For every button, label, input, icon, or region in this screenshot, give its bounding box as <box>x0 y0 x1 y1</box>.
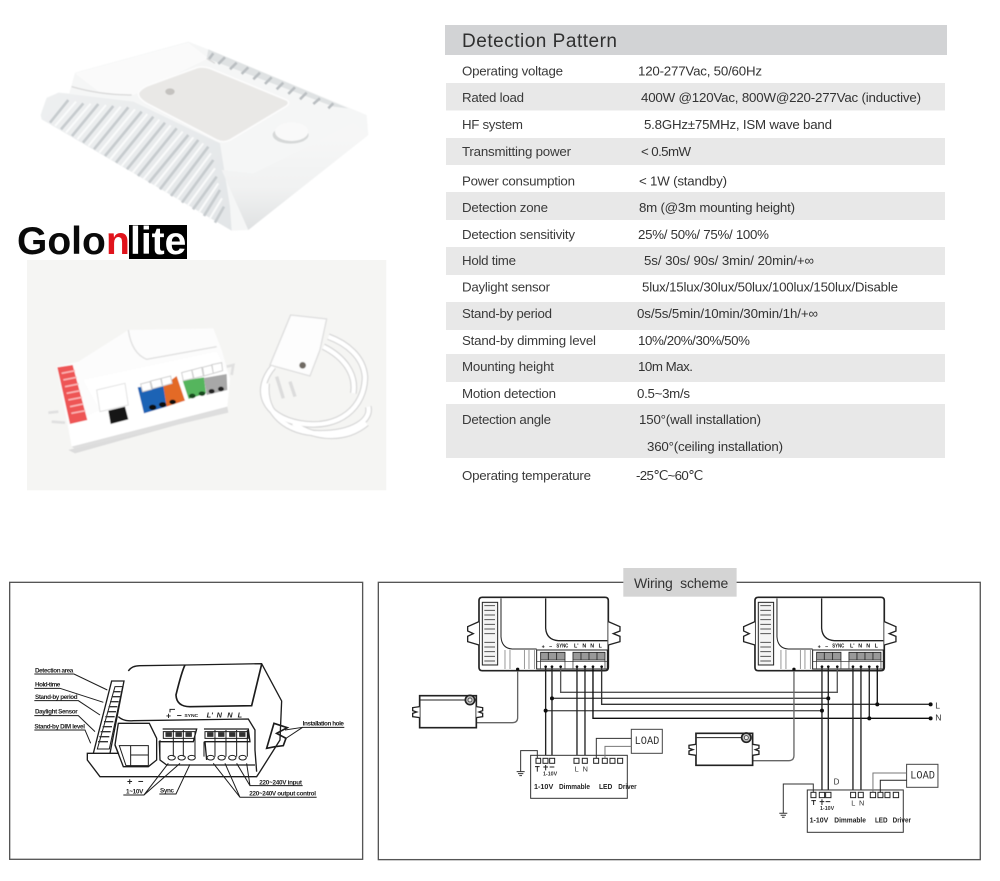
left heat sink fins <box>41 93 232 231</box>
table heading <box>445 25 947 55</box>
LED driver 2: N <box>859 799 864 808</box>
ground wire 2 <box>779 784 813 817</box>
terminal colours <box>138 383 167 413</box>
table: detection pattern specifications: < 0.5mW <box>641 144 691 159</box>
table: detection pattern specifications: 10m Max. <box>638 359 693 374</box>
sensor module line drawing <box>87 664 282 777</box>
table: detection pattern specifications: Mounting height <box>462 359 554 374</box>
terminal holes <box>168 755 246 760</box>
front lower edge <box>222 123 368 230</box>
table: detection pattern specifications: 360°(ceiling installation) <box>647 439 783 454</box>
table: detection pattern specifications: Stand-by dimming level <box>462 333 596 348</box>
sensor module 2: N <box>866 644 870 650</box>
sensor module 2: L <box>875 644 879 650</box>
callout labels: Stand-by DIM level <box>34 723 85 730</box>
sensor module 1: L' <box>574 644 579 650</box>
top cover plate <box>75 43 208 95</box>
RJ jack <box>97 383 128 412</box>
table: detection pattern specifications: < 1W (standby) <box>639 174 727 188</box>
table: detection pattern specifications: -25℃~60℃ <box>636 468 703 483</box>
table: detection pattern specifications: Motion detection <box>462 386 556 401</box>
line labels L and N <box>935 701 942 723</box>
table: detection pattern specifications <box>445 25 947 483</box>
table: detection pattern specifications: 150°(wall installation) <box>639 412 761 427</box>
table heading: Detection Pattern <box>462 31 617 52</box>
LOAD box 1 <box>596 729 662 758</box>
callout labels: Hold-time <box>35 682 61 689</box>
lamp body <box>42 42 368 231</box>
sensor module 1 <box>468 597 620 671</box>
table: detection pattern specifications: 120-277Vac, 50/60Hz <box>638 64 762 78</box>
table: detection pattern specifications: Stand-by period <box>462 306 552 321</box>
panel: wiring scheme <box>378 568 980 860</box>
LED driver 2: 1-10V <box>820 806 835 812</box>
LOAD box 2 <box>873 764 938 792</box>
table: detection pattern specifications: 0s/5s/5min/10min/30min/1h/+∞ <box>637 306 819 321</box>
table: detection pattern specifications: Transmitting power <box>462 144 572 159</box>
table: detection pattern specifications: Detection zone <box>462 200 548 215</box>
remote sensor head <box>270 315 327 376</box>
terminal markings: N <box>227 711 233 720</box>
table: detection pattern specifications: HF system <box>462 117 523 132</box>
table: detection pattern specifications: 400W @120Vac, 800W@220-277Vac (inductive) <box>641 90 921 105</box>
callout labels: − <box>138 776 144 786</box>
wiring label tab <box>623 568 737 597</box>
LED driver 2: L <box>851 799 855 808</box>
sensor head cables <box>476 669 794 761</box>
terminal markings: L <box>238 711 243 720</box>
table: detection pattern specifications: 5lux/15lux/30lux/50lux/100lux/150lux/Disable <box>642 280 898 294</box>
LED driver 1: N <box>583 764 588 773</box>
drop wires to drivers <box>546 667 861 792</box>
sensor module 2: N <box>858 644 862 650</box>
LED driver 1: 1-10V <box>534 782 554 791</box>
junction dots <box>516 665 933 720</box>
table: detection pattern specifications: 5s/ 30s/ 90s/ 3min/ 20min/+∞ <box>644 253 815 268</box>
sensor module 2: + <box>818 644 821 650</box>
LED driver 1: 1-10V <box>543 772 558 778</box>
brand logo: Golonlite: n <box>106 220 130 263</box>
terminal markings: + <box>166 710 171 720</box>
sensor module body <box>57 328 230 447</box>
terminal markings: − <box>177 710 182 720</box>
DIP switch block <box>57 365 87 424</box>
wiring label tab: Wiring scheme <box>634 575 729 591</box>
sensor module 1: SYNC <box>556 644 568 650</box>
LED driver 1: L <box>575 764 579 773</box>
callout labels: 220~240V output control <box>249 790 316 797</box>
callout labels: Installation hole <box>303 721 344 728</box>
leader lines <box>34 674 344 797</box>
photo: sensor module and cable <box>27 260 386 490</box>
table: detection pattern specifications: 25%/ 50%/ 75%/ 100% <box>638 227 769 242</box>
LED driver 2: Dimmable <box>834 816 866 825</box>
brand logo: Golonlite <box>17 220 187 263</box>
table: detection pattern specifications: Detection angle <box>462 412 551 427</box>
terminal buttons <box>141 363 223 392</box>
sensor module 2: SYNC <box>832 644 844 650</box>
photo: LED canopy light <box>41 42 368 231</box>
table: detection pattern specifications: Daylight sensor <box>462 280 551 294</box>
terminal holes <box>149 405 156 410</box>
LED driver 2: Driver <box>893 816 911 825</box>
callout labels: Detection area <box>35 668 74 675</box>
sensor module 2: L' <box>850 644 854 650</box>
callout labels: Daylight Sensor <box>35 709 78 716</box>
table: detection pattern specifications: Operating temperature <box>462 468 591 483</box>
LED driver 2 <box>807 790 911 832</box>
terminal markings: SYNC <box>184 713 199 719</box>
callout labels: Sync <box>160 787 174 794</box>
callout labels: 1~10V <box>126 788 144 795</box>
terminal markings: L' <box>207 711 213 720</box>
table: detection pattern specifications: 8m (@3m mounting height) <box>639 200 795 215</box>
line labels L and N: N <box>935 713 942 723</box>
remote sensor box 2 <box>689 733 759 765</box>
table: detection pattern specifications: Rated load <box>462 90 524 105</box>
sensor module shadow <box>68 383 233 453</box>
table: detection pattern specifications: 5.8GHz±75MHz, ISM wave band <box>644 117 832 132</box>
ground wire 1 <box>517 751 537 776</box>
sensor button <box>273 126 309 144</box>
remote sensor box 1 <box>413 695 483 728</box>
brand logo: Golonlite: Golo <box>17 220 106 263</box>
callout labels <box>34 668 344 797</box>
cable coil <box>263 337 369 436</box>
sensor module 1: + <box>542 644 545 650</box>
sensor module 1: − <box>549 644 552 650</box>
callout labels: + <box>127 776 133 786</box>
sensor module 2: − <box>825 644 828 650</box>
LOAD box 2: LOAD <box>910 770 935 782</box>
panel: terminal and switch diagram <box>10 582 363 859</box>
LED driver 2: 1-10V <box>810 816 829 825</box>
table: detection pattern specifications: 0.5~3m/s <box>637 386 690 401</box>
LOAD box 1: LOAD <box>635 736 659 748</box>
rear heat sink fins <box>207 49 348 108</box>
LED driver 1: Dimmable <box>559 782 590 791</box>
D label: D <box>834 777 840 786</box>
LED driver 1 <box>531 755 637 798</box>
LED driver 1: LED <box>599 782 613 791</box>
table: detection pattern specifications: Hold time <box>462 253 516 268</box>
callout labels: 220~240V input <box>259 779 303 786</box>
lens window <box>138 67 289 142</box>
table: detection pattern specifications: Detection sensitivity <box>462 227 575 242</box>
table: detection pattern specifications: Power consumption <box>462 174 575 188</box>
LED driver 1: Driver <box>618 782 637 791</box>
installation hole tabs <box>267 723 287 748</box>
table: detection pattern specifications: 10%/20%/30%/50% <box>638 333 750 348</box>
line labels L and N: L <box>935 701 940 711</box>
bus wires <box>546 667 931 718</box>
callout labels: Stand-by period <box>35 694 78 701</box>
sensor module 1: N <box>582 644 586 650</box>
sensor module 1: L <box>599 644 603 650</box>
LED driver 2: LED <box>875 816 888 825</box>
table: detection pattern specifications: Operating voltage <box>462 64 563 78</box>
terminal markings <box>166 709 243 720</box>
terminal markings: N <box>217 711 223 720</box>
sensor module 2 <box>744 597 896 671</box>
sensor module 1: N <box>590 644 594 650</box>
brand logo: Golonlite: lite <box>130 220 186 263</box>
